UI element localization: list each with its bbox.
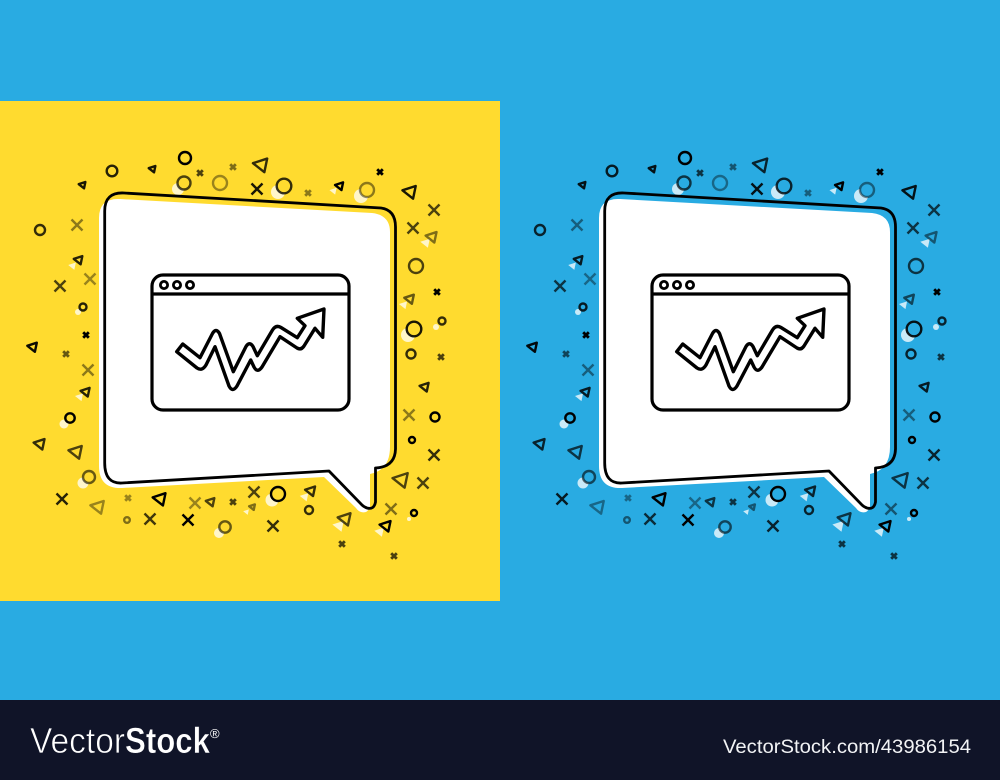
speech bubble: yellow panel xyxy=(99,193,396,512)
panel: yellow xyxy=(0,101,500,601)
VectorStock logo: Vector xyxy=(30,720,125,761)
confetti shapes: blue panel xyxy=(527,152,946,559)
speech bubble: blue panel xyxy=(599,193,896,512)
icon: browser window with rising chart xyxy=(152,275,349,410)
icon: browser window with rising chart, blue panel xyxy=(652,275,849,410)
image id: VectorStock.com/43986154 xyxy=(723,737,971,758)
confetti shapes: yellow panel xyxy=(27,152,446,559)
panel: blue xyxy=(527,152,946,559)
footer bar xyxy=(0,700,1000,780)
VectorStock logo: ® xyxy=(210,726,220,741)
VectorStock logo xyxy=(30,720,220,761)
VectorStock logo: Stock xyxy=(125,720,211,761)
